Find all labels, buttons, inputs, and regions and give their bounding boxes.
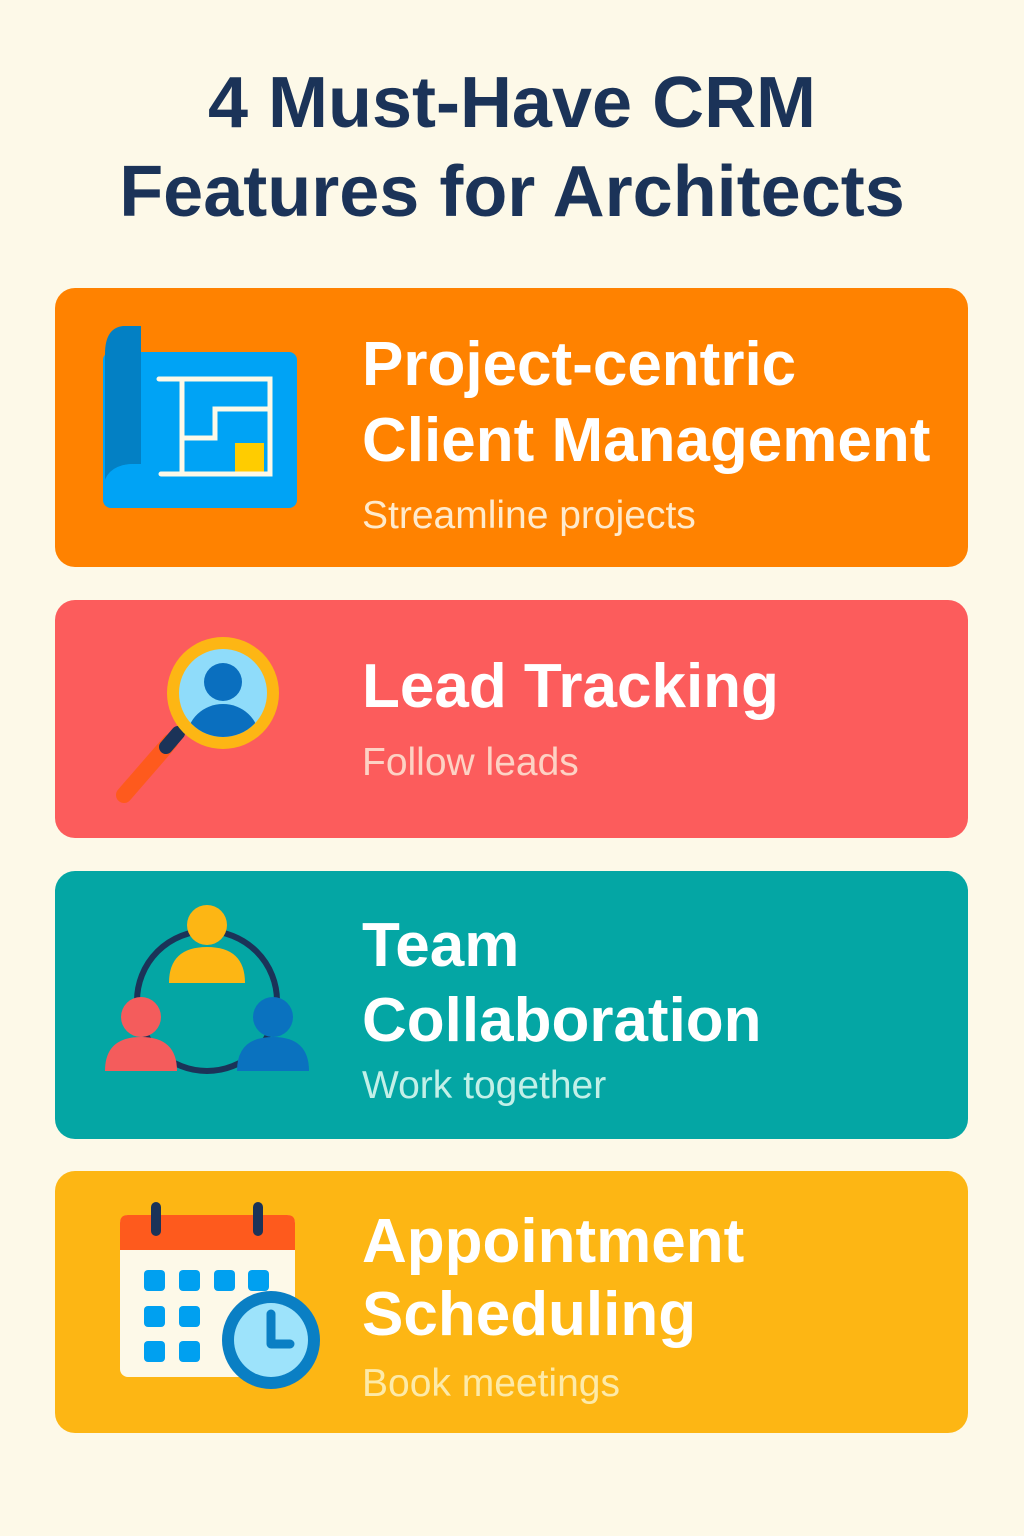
panel: team collaboration (55, 871, 968, 1139)
subtitle: Work together (362, 1064, 606, 1107)
icon: calendar with clock (120, 1202, 320, 1389)
panel: project-centric client management (55, 288, 968, 567)
subtitle: Streamline projects (362, 494, 696, 537)
panel: lead tracking (55, 600, 968, 838)
heading: Team (362, 911, 519, 980)
icon: blueprint (103, 326, 297, 508)
subtitle: Book meetings (362, 1362, 620, 1405)
title (119, 63, 905, 232)
heading: Lead Tracking (362, 652, 779, 721)
heading: Appointment (362, 1207, 744, 1276)
title: 4 Must-Have CRM (208, 63, 816, 143)
panel: appointment scheduling: Scheduling (362, 1280, 696, 1349)
heading: Project-centric (362, 330, 796, 399)
panel: project-centric client management: Client Management (362, 406, 930, 475)
subtitle: Follow leads (362, 741, 579, 784)
icon: magnifier with person (116, 637, 279, 803)
icon: team circle (105, 905, 309, 1074)
title: Features for Architects (119, 152, 905, 232)
panel: appointment scheduling (55, 1171, 968, 1433)
panel: team collaboration: Collaboration (362, 986, 762, 1055)
